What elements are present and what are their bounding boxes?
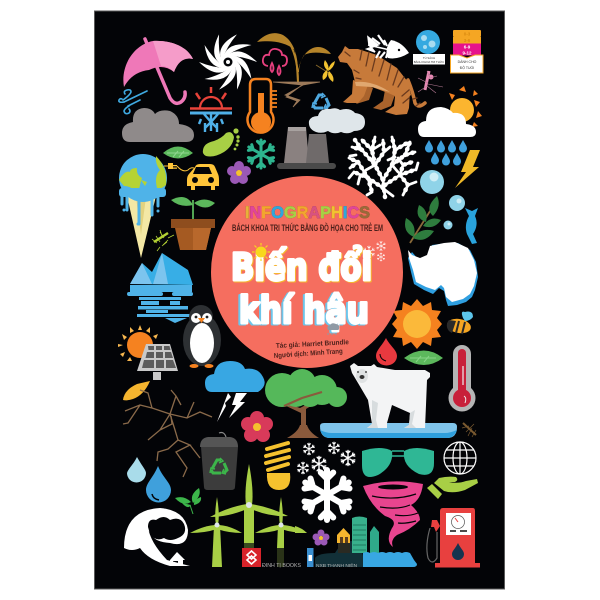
badge: age range: 3-6 [464,38,471,43]
icon: orange thermometer [248,79,277,133]
icon: fuel pump [427,508,480,568]
icon: rain cloud outline [263,49,287,75]
icon: footprint [203,128,240,156]
icon: small purple flower [312,530,330,546]
logo: NXB Thanh Niên [307,548,357,568]
logo: Đinh Tị Books: ĐINH TỊ BOOKS [262,563,301,569]
icon: hurricane spiral [198,31,258,93]
icon: iceberg [127,253,193,323]
translator credit: Người dịch: Minh Trang [274,348,343,360]
icon: Antarctica map [408,242,478,306]
icon: green dragonfly [175,488,201,514]
icon: blue cloud with lightning [205,361,265,422]
icon: yellow lightning [455,150,480,188]
icon: sunglasses [362,448,434,477]
badge: age range: DÀNH CHO [458,60,477,64]
icon: wave over house [124,508,190,566]
icon: fish bone [367,35,409,58]
icon: helping hand [427,477,478,499]
icon: tiger [338,46,425,115]
main title line 2: khí hậu [239,289,369,332]
icon: pink umbrella [123,39,193,103]
icon: green branch [405,196,441,243]
badge: age range: 0-3 [464,32,471,36]
icon: wind turbines [190,464,307,567]
icon: wireframe globe [444,442,476,474]
icon: white coral [349,137,418,197]
logo: Đinh Tị Books [242,548,301,569]
icon: blood-red drop [376,338,397,366]
icon: polar bear on ice [320,363,457,438]
icon: leaf [163,146,193,158]
icon: sun behind white cloud [418,86,482,137]
icon: bubble [420,170,444,194]
icon: factory cooling towers [277,127,336,169]
icon: pink tornado [363,481,423,547]
icon: wind [119,90,147,114]
icon: cracked earth [123,390,212,477]
badge: children's knowledge series [413,30,445,64]
badge: age range: 6-9 [464,44,471,50]
icon: purple flower [227,161,251,184]
icon: big snowflake [304,470,350,520]
badge: children's knowledge series: TỦ SÁCH [423,55,435,60]
icon: pale cloud [309,108,365,133]
icon: pink ant [418,71,443,93]
icon: wilted plant [257,33,331,82]
title circle [211,176,403,368]
icon: tree [265,369,347,438]
badge: age range [450,30,483,73]
series title: Infographics: INFOGRAPHICS [245,203,370,222]
icon: energy-saving bulb [266,443,290,490]
subtitle: BÁCH KHOA TRI THỨC BẰNG ĐỒ HỌA CHO TRẺ EM [232,222,383,234]
icon: cracked ground [273,82,320,107]
icon: potted seedling [171,197,215,250]
badge: age range: ĐỘ TUỔI [460,65,474,70]
icon: red thermometer [448,345,476,412]
icon: small leaf [295,526,307,533]
icon: sun behind solar panel [118,325,178,380]
icon: blue recycle [312,93,329,109]
icon: yellow leaf [123,381,150,400]
icon: yellow dragonfly [316,60,335,82]
main title line 1: Biến đổi [231,246,372,289]
icon: blue fish [465,208,478,244]
icon: teal snowflake [248,140,274,168]
book cover background [94,11,504,589]
icon: penguin [183,305,221,368]
icon: small bubbles [444,195,465,230]
badge: age range: 9-12 [462,50,472,56]
icon: bee [446,312,473,335]
icon: water drops [127,457,171,502]
icon: orange sun [392,299,442,349]
icon: rain drops [425,140,467,166]
icon: small rain cloud on title [327,323,339,335]
icon: grey cloud [122,108,194,142]
badge: children's knowledge series: BÁCH KHOA TRI THỨC [414,59,444,64]
icon: recycling bin [200,432,238,490]
icon: sun on title [252,243,270,261]
icon: pale green leaf [404,350,443,365]
icon: mosquito [462,423,476,437]
logo: NXB Thanh Niên: NXB THANH NIÊN [316,561,357,568]
icon: yellow car with plug [164,163,219,190]
author credit: Tác giả: Harriet Brundle [276,339,349,350]
icon: melting earth ice cream [119,154,167,258]
icon: snowflakes on title [364,241,385,261]
icon: small snowflakes [298,442,355,474]
icon: green bug [152,230,174,251]
icon: sun above snowflake [190,87,232,132]
icon: city by the water [315,516,417,567]
icon: red flower [241,411,273,442]
